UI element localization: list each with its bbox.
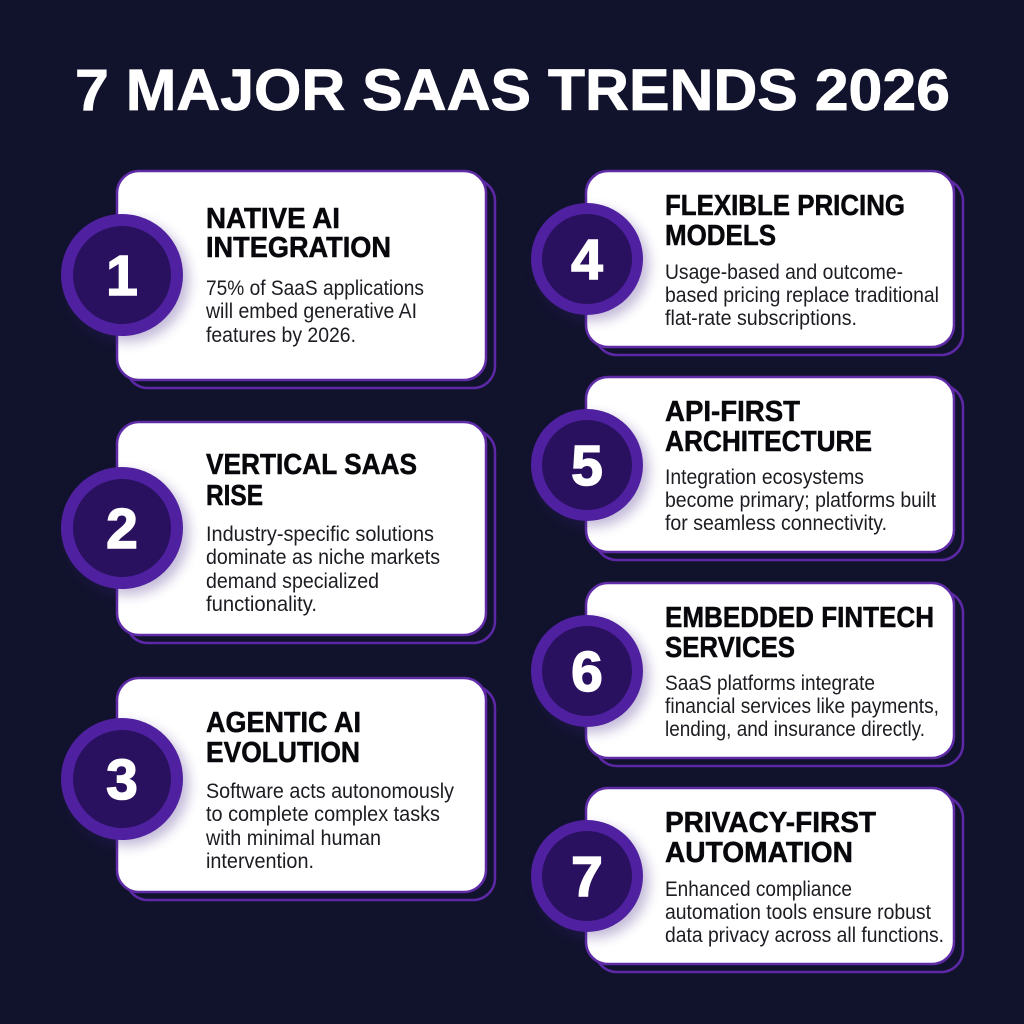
text: trend 6 description: SaaS platforms integrate bbox=[665, 671, 875, 695]
text: trend 6 description bbox=[665, 671, 939, 741]
text: trend 2 description: Industry-specific solutions bbox=[206, 522, 434, 546]
title: 7 MAJOR SAAS TRENDS 2026 bbox=[75, 58, 950, 123]
text: trend 1 description: 75% of SaaS applications bbox=[206, 276, 424, 300]
heading: vertical SaaS rise bbox=[206, 449, 417, 512]
text: trend 2 description: demand specialized bbox=[206, 569, 379, 593]
panel: trend 7 privacy-first automation bbox=[531, 788, 963, 972]
heading: privacy-first automation: PRIVACY-FIRST bbox=[665, 807, 877, 839]
icon: number 4 badge: 4 bbox=[571, 228, 603, 292]
heading: privacy-first automation: AUTOMATION bbox=[665, 837, 853, 869]
text: trend 5 description: for seamless connectivity. bbox=[665, 511, 887, 535]
text: trend 1 description: will embed generative AI bbox=[205, 299, 417, 323]
text: trend 7 description: automation tools ensure robust bbox=[665, 900, 931, 924]
icon: number 3 badge: 3 bbox=[106, 748, 138, 812]
heading: native AI integration: INTEGRATION bbox=[206, 232, 391, 264]
heading: agentic AI evolution bbox=[206, 707, 361, 769]
text: trend 1 description bbox=[205, 276, 424, 347]
panel: trend 2 vertical SaaS rise bbox=[61, 422, 495, 643]
heading: embedded fintech services: EMBEDDED FINTECH bbox=[665, 602, 934, 634]
panel: trend 5 API-first architecture bbox=[531, 377, 963, 560]
heading: embedded fintech services bbox=[665, 602, 934, 664]
text: trend 5 description: become primary; platforms built bbox=[665, 488, 936, 512]
text: trend 7 description bbox=[665, 877, 944, 947]
heading: privacy-first automation bbox=[665, 807, 877, 869]
text: trend 4 description: flat-rate subscriptions. bbox=[665, 306, 857, 330]
text: trend 4 description: based pricing replace traditional bbox=[665, 283, 939, 307]
heading: vertical SaaS rise: RISE bbox=[206, 480, 263, 512]
panel: trend 6 embedded fintech services bbox=[531, 583, 963, 766]
text: trend 5 description bbox=[665, 465, 936, 535]
text: trend 2 description bbox=[206, 522, 440, 616]
icon: number 3 badge bbox=[61, 718, 189, 846]
text: trend 4 description bbox=[665, 260, 939, 330]
heading: native AI integration: NATIVE AI bbox=[206, 203, 340, 235]
text: trend 3 description bbox=[205, 779, 454, 873]
text: trend 3 description: intervention. bbox=[206, 849, 314, 873]
panel: trend 4 flexible pricing models bbox=[531, 171, 963, 355]
heading: native AI integration bbox=[206, 203, 391, 264]
text: trend 3 description: Software acts autonomously bbox=[206, 779, 454, 803]
heading: flexible pricing models: MODELS bbox=[665, 220, 776, 252]
text: trend 7 description: data privacy across all functions. bbox=[665, 923, 944, 947]
text: trend 4 description: Usage-based and outcome- bbox=[665, 260, 903, 284]
icon: number 7 badge bbox=[531, 820, 649, 938]
icon: number 6 badge: 6 bbox=[571, 640, 603, 704]
icon: number 1 badge: 1 bbox=[106, 244, 138, 308]
text: trend 2 description: functionality. bbox=[206, 592, 317, 616]
heading: API-first architecture: API-FIRST bbox=[665, 396, 801, 428]
icon: number 5 badge bbox=[531, 409, 649, 527]
heading: flexible pricing models bbox=[665, 190, 905, 252]
heading: agentic AI evolution: EVOLUTION bbox=[206, 737, 360, 769]
text: trend 3 description: to complete complex tasks bbox=[206, 802, 440, 826]
icon: number 1 badge bbox=[61, 214, 189, 342]
heading: agentic AI evolution: AGENTIC AI bbox=[206, 707, 361, 739]
icon: number 4 badge bbox=[531, 203, 649, 321]
text: trend 6 description: financial services like payments, bbox=[665, 694, 939, 718]
panel: trend 3 agentic AI evolution bbox=[61, 678, 495, 900]
text: trend 5 description: Integration ecosystems bbox=[665, 465, 864, 489]
icon: number 5 badge: 5 bbox=[571, 434, 603, 498]
text: trend 3 description: with minimal human bbox=[205, 826, 381, 850]
panel: trend 1 native AI integration bbox=[61, 171, 495, 388]
text: trend 1 description: features by 2026. bbox=[206, 323, 356, 347]
heading: API-first architecture bbox=[665, 396, 872, 458]
text: trend 2 description: dominate as niche markets bbox=[206, 545, 440, 569]
heading: API-first architecture: ARCHITECTURE bbox=[665, 426, 872, 458]
heading: flexible pricing models: FLEXIBLE PRICING bbox=[665, 190, 905, 222]
icon: number 6 badge bbox=[531, 615, 649, 733]
heading: embedded fintech services: SERVICES bbox=[665, 632, 795, 664]
heading: vertical SaaS rise: VERTICAL SAAS bbox=[206, 449, 417, 481]
icon: number 2 badge: 2 bbox=[106, 497, 138, 561]
icon: number 7 badge: 7 bbox=[571, 845, 603, 909]
icon: number 2 badge bbox=[61, 467, 189, 595]
text: trend 7 description: Enhanced compliance bbox=[665, 877, 852, 901]
text: trend 6 description: lending, and insurance directly. bbox=[665, 717, 925, 741]
